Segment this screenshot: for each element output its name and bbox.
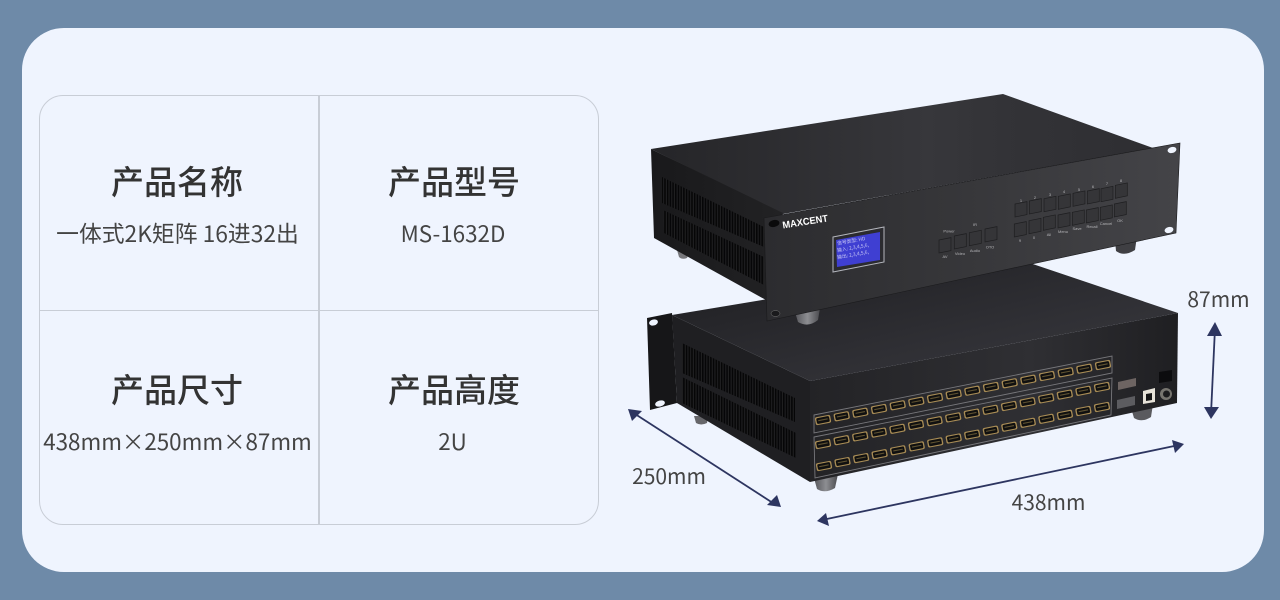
foot: upper device [677,236,1137,325]
spec: product model [388,156,520,249]
spec: product name [56,156,299,249]
button labels: All [1047,232,1051,237]
upper device: front view [651,94,1180,325]
dimension label: 438mm: 438mm [1012,487,1085,517]
HDMI ports [815,360,1111,471]
rear connectors [1117,370,1172,409]
button labels: 2 [1034,195,1037,200]
button labels: Menu [1058,229,1068,234]
lower device side face [672,315,810,482]
upper device front panel [764,143,1180,321]
spec: product model: MS-1632D [401,217,505,249]
LCD display: 信号类型: HD [837,235,866,247]
button labels: Video [955,251,966,256]
button labels: OK [1117,218,1123,223]
button labels: Cancel [1100,221,1112,226]
spec: product height: 2U [438,425,467,457]
spec: product size: 438mm×250mm×87mm [43,425,312,457]
ear holes [768,146,1177,316]
logo: MAXCENT [782,213,829,231]
button labels: 9 [1019,238,1022,243]
arrow: width 438mm [817,440,1184,526]
lower device rear face [810,313,1178,482]
panel: specification table [39,95,599,525]
LCD display: 输出: 2,3,4,5,6, [837,248,870,261]
button labels: 8 [1120,178,1123,183]
spec: product name: 产品名称 [111,156,243,204]
button labels: Recall [1086,224,1098,229]
upper device side face [651,149,783,300]
button labels: 4 [1063,189,1066,194]
arrow: depth 250mm [628,409,781,507]
function buttons [939,227,997,253]
button labels: 5 [1078,187,1081,192]
spec: product size [43,364,312,457]
lower device side vents [682,343,796,458]
spec: product size: 产品尺寸 [111,364,243,412]
button labels [942,178,1123,259]
button labels: Audio [970,248,981,253]
dimension label: 250mm: 250mm [632,461,706,491]
lower device top face [672,258,1178,381]
button labels: Power [943,228,955,234]
button labels: IR [973,222,977,227]
dimension label: 87mm: 87mm [1187,284,1250,314]
number buttons [1014,183,1127,237]
lower device ear [647,313,677,410]
button labels: 7 [1106,181,1109,186]
HDMI group frames [814,356,1112,478]
LCD display: 输入: 2,3,4,5,6, [837,241,870,254]
button labels: 1 [1020,198,1023,203]
button labels: AV [942,254,948,259]
upper device top face [651,94,1153,214]
foot: lower device [694,404,1153,491]
LCD display [833,227,884,272]
spec: product model: 产品型号 [388,156,520,204]
button labels: 0 [1033,235,1036,240]
button labels: OTO [986,244,994,250]
button labels: 3 [1049,192,1052,197]
lower device: rear view [647,258,1178,491]
upper device side vents [662,177,764,285]
spec: product height: 产品高度 [388,364,520,412]
spec: product name: 一体式2K矩阵 16进32出 [56,216,299,249]
button labels: 6 [1092,184,1095,189]
button labels: Save [1072,226,1082,231]
spec: product height [388,364,520,457]
arrow: height 87mm [1204,322,1222,419]
